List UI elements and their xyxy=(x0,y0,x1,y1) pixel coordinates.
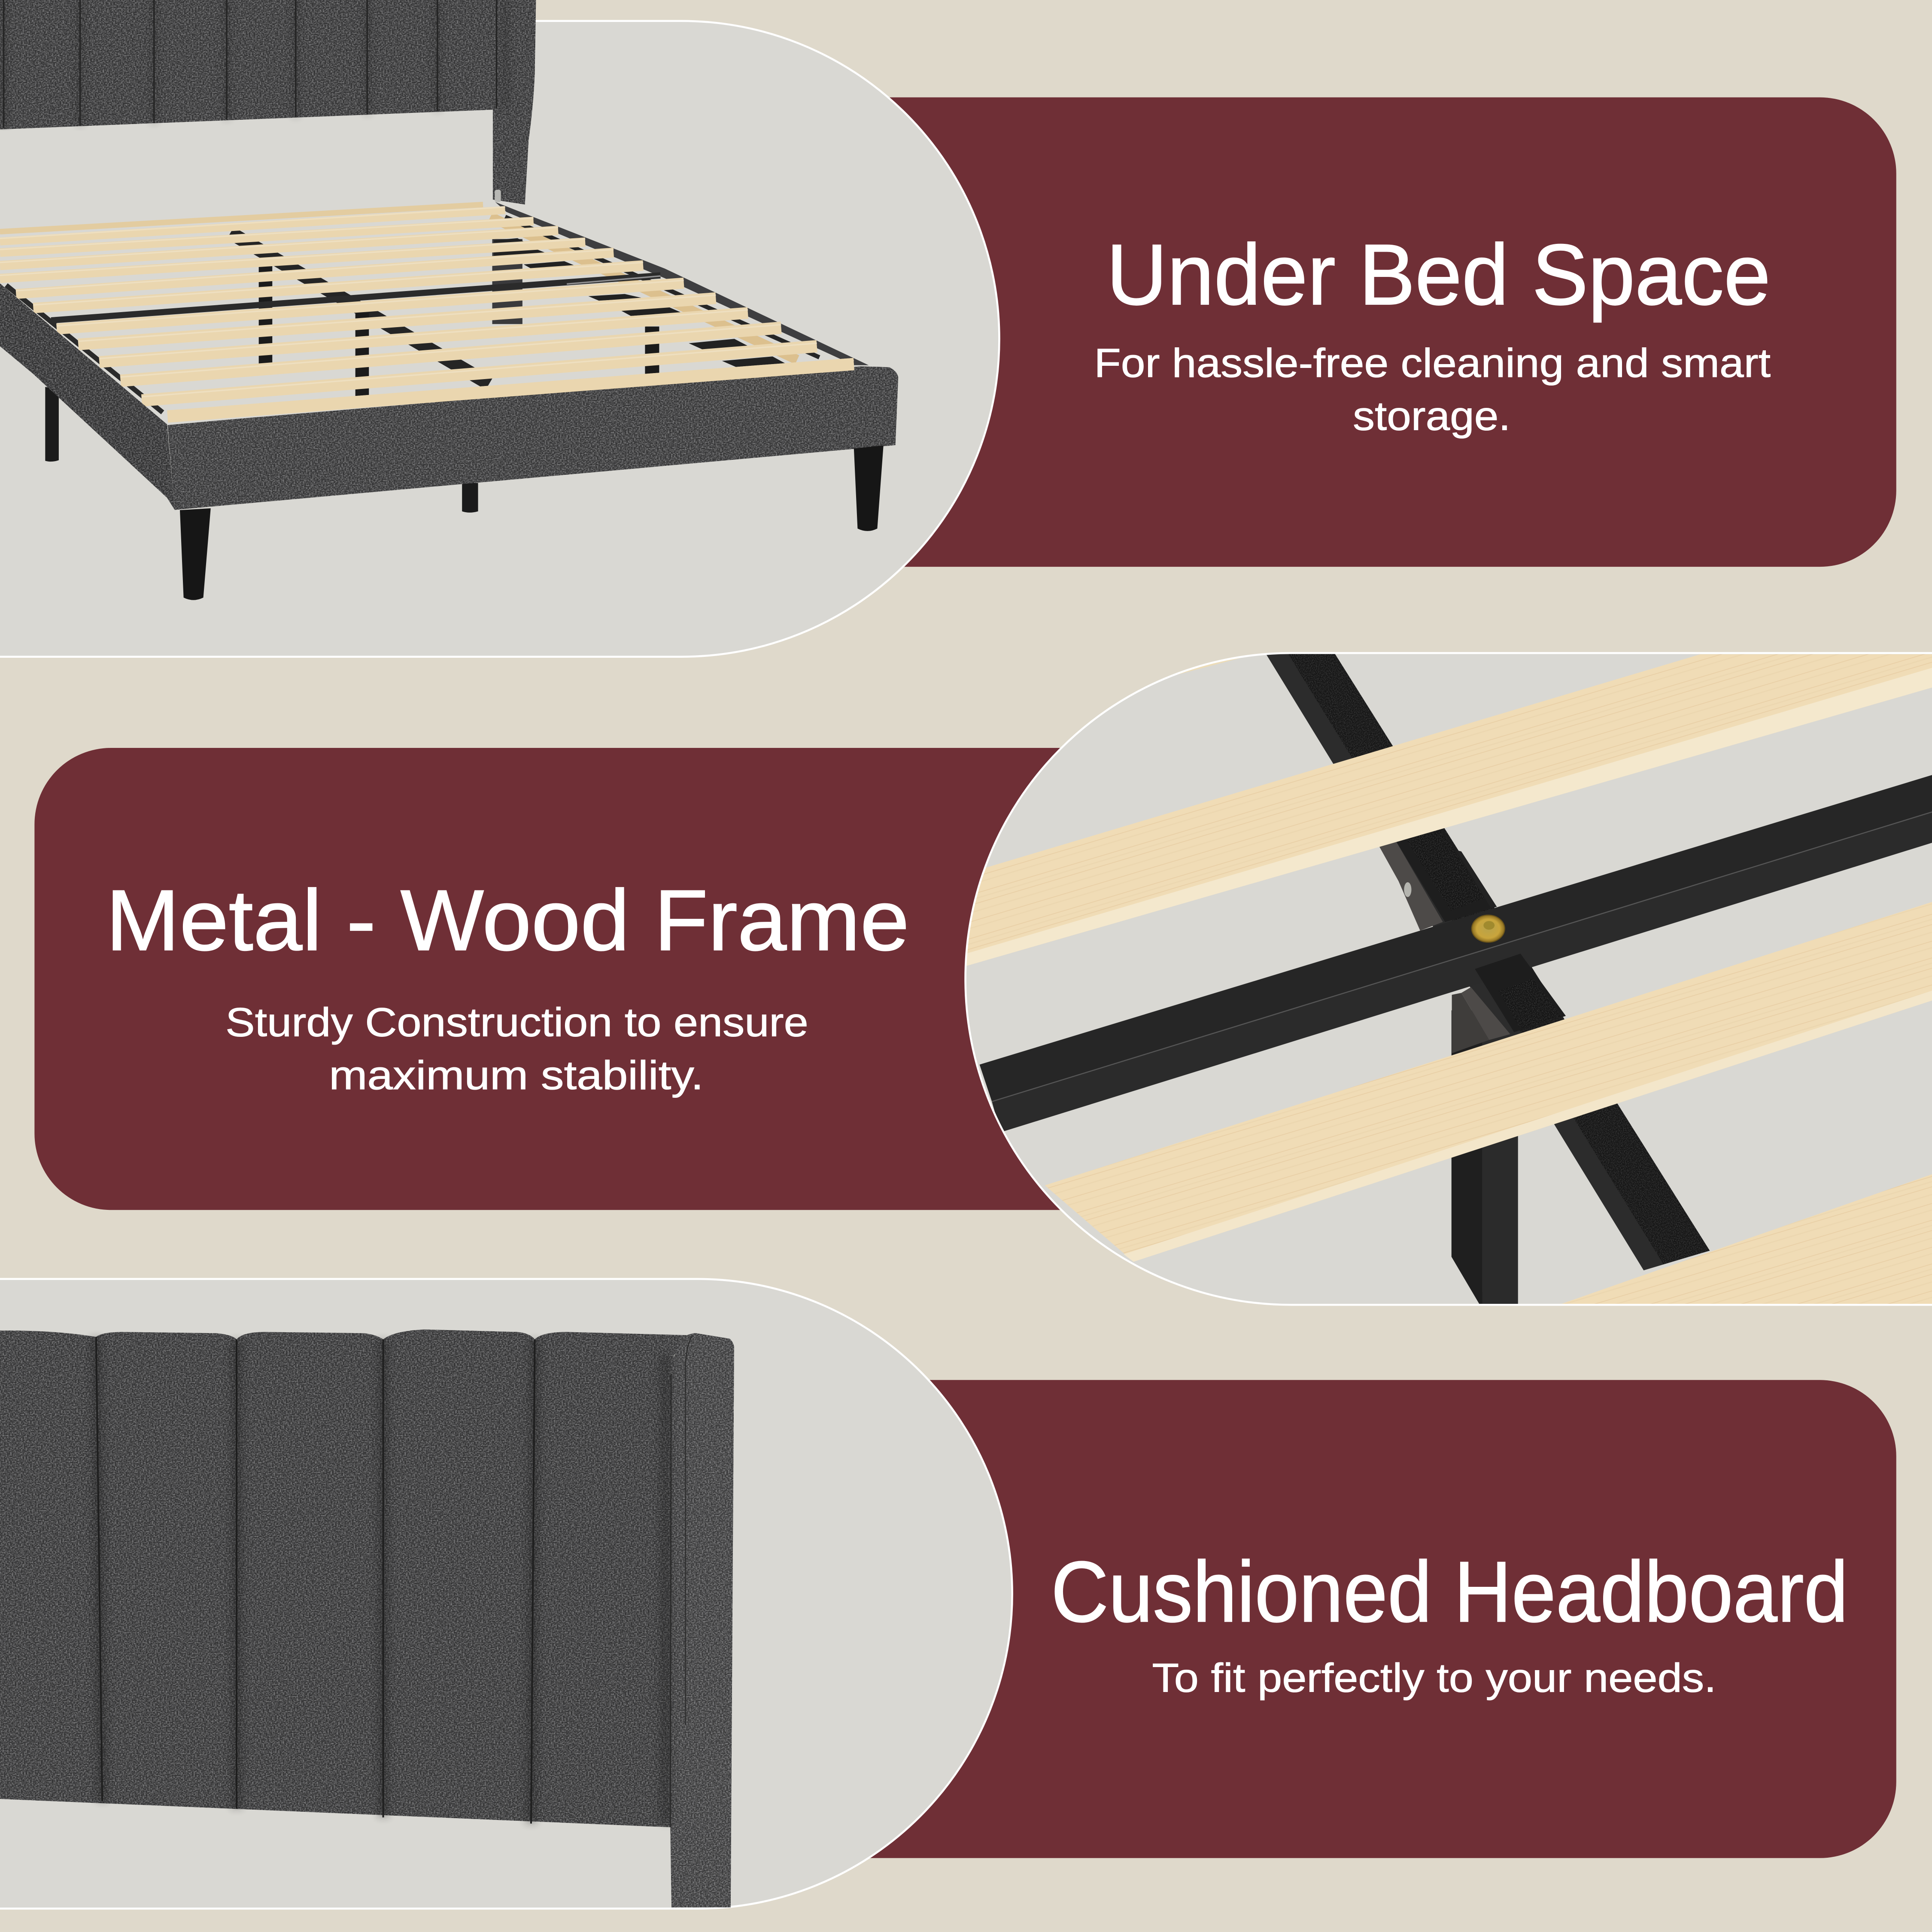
front left leg xyxy=(180,508,211,600)
icon: headboard bracket xyxy=(495,190,501,202)
front slat re-drawn over rail xyxy=(167,364,854,416)
heading: Under Bed Space: Under Bed Space xyxy=(1106,226,1771,323)
text: under bed description: For hassle-free cleaning and smart xyxy=(1094,340,1771,386)
back right leg xyxy=(462,483,478,513)
heading: Metal - Wood Frame: Metal - Wood Frame xyxy=(106,872,909,969)
diagonal rail xyxy=(1265,653,1710,1270)
wood sliver top xyxy=(1140,653,1259,681)
panel: cushioned headboard card xyxy=(739,1380,1896,1858)
image panel: metal and wood close-up xyxy=(966,653,1932,1305)
screw xyxy=(1404,882,1411,897)
image panel: bed with slats xyxy=(0,0,999,657)
black band with velcro xyxy=(1393,823,1497,922)
text: headboard description: To fit perfectly to your needs. xyxy=(1152,1655,1716,1701)
grey side plate above rail xyxy=(1377,837,1443,931)
bolt xyxy=(1472,915,1505,942)
panel: under bed space card xyxy=(739,97,1896,567)
grey leg top below rail xyxy=(1452,987,1510,1053)
wood slat upper xyxy=(966,654,1932,966)
back leg support xyxy=(492,239,522,324)
text: under bed description: storage. xyxy=(1353,394,1510,439)
image panel: headboard close-up xyxy=(0,1279,1012,1908)
text: frame description: Sturdy Construction to ensure xyxy=(225,1000,808,1045)
frame rails under slats xyxy=(6,202,869,413)
horizontal rail xyxy=(980,775,1932,1132)
headboard of full bed xyxy=(0,0,536,204)
upholstered headboard xyxy=(0,1330,734,1908)
text: under bed description xyxy=(1094,340,1771,439)
front rail xyxy=(167,366,898,510)
side rail xyxy=(0,283,175,510)
channel seams xyxy=(96,1335,693,1827)
wooden slats xyxy=(0,204,854,416)
wood slat middle xyxy=(1045,902,1932,1262)
support leg xyxy=(1452,1010,1518,1305)
close-up photo contents xyxy=(966,653,1932,1305)
text: frame description: maximum stability. xyxy=(329,1053,704,1098)
back left leg xyxy=(45,387,59,462)
panel: metal wood frame card xyxy=(34,748,1207,1210)
panel outline xyxy=(966,653,1932,1305)
channel seam shadows xyxy=(96,1337,665,1823)
front right leg xyxy=(854,445,884,531)
text: frame description xyxy=(225,1000,808,1098)
heading: Cushioned Headboard: Cushioned Headboard xyxy=(1051,1543,1848,1640)
wood slat lower xyxy=(1558,1174,1932,1305)
headboard wing xyxy=(670,1333,734,1908)
rail end block xyxy=(1475,954,1566,1032)
